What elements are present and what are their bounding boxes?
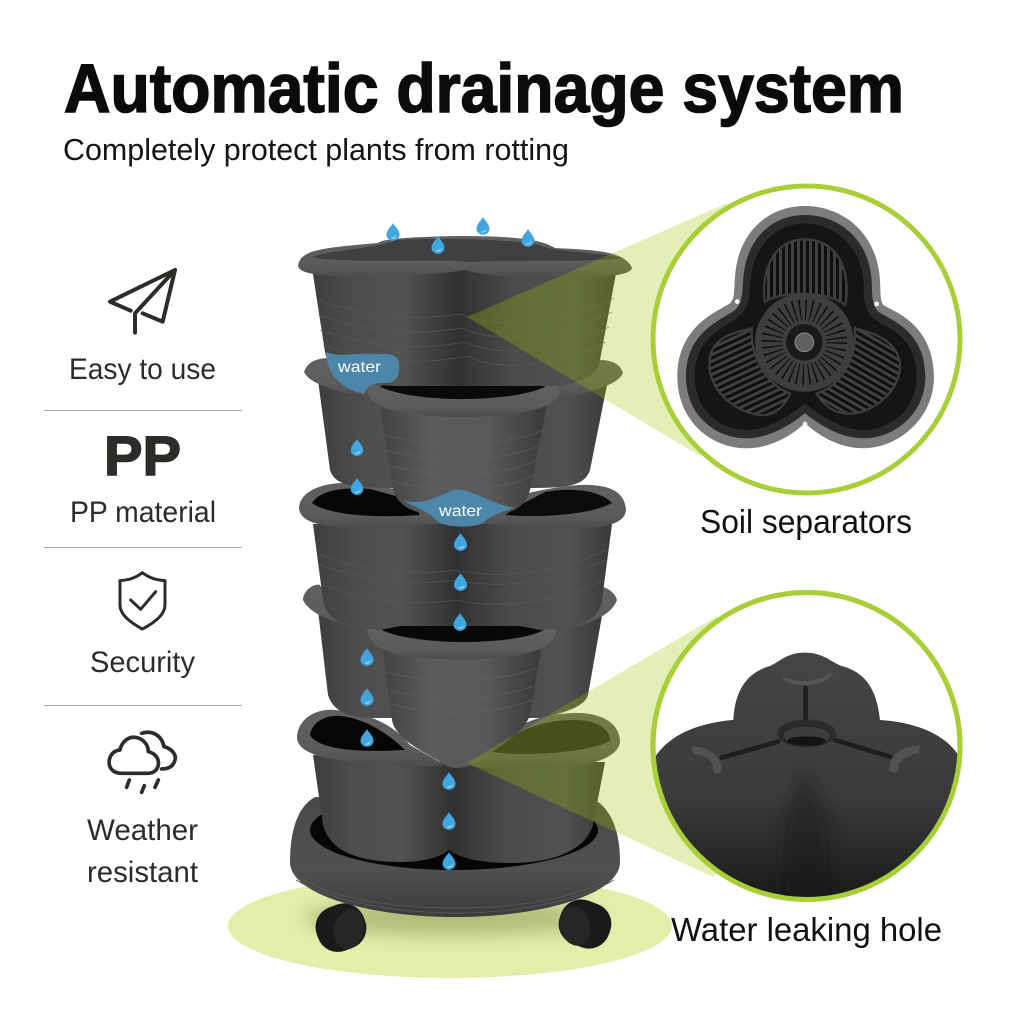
label: security: Security <box>90 646 195 679</box>
title: Automatic drainage system <box>64 50 904 127</box>
green cone: top callout <box>467 203 806 456</box>
tier 5 right rim <box>470 713 620 768</box>
tier 5 left rim <box>297 710 445 767</box>
subtitle: Completely protect plants from rotting <box>63 132 569 167</box>
water label: centre: water <box>438 503 483 520</box>
pot underside view <box>650 653 963 910</box>
label: pp material: PP material <box>70 496 216 529</box>
water label: upper left <box>326 352 399 394</box>
icon: paper plane <box>110 270 175 333</box>
water label: upper left: water <box>337 359 382 376</box>
right wheel <box>553 893 617 955</box>
label: easy to use: Easy to use <box>69 353 216 386</box>
feet <box>782 672 833 685</box>
tier 5 pots <box>297 710 620 863</box>
label: weather resistant line 2: resistant <box>87 856 199 889</box>
water label: centre <box>402 490 515 527</box>
label: weather resistant: Weather <box>87 814 198 847</box>
panel: water leaking hole callout <box>650 592 963 948</box>
water drops <box>351 217 534 870</box>
right grate <box>817 328 900 414</box>
top grate <box>764 239 847 305</box>
panel: feature list <box>44 270 242 889</box>
label: water leaking hole: Water leaking hole <box>671 911 942 948</box>
tier 4 back pots <box>303 585 617 718</box>
green cone: bottom callout <box>467 616 806 877</box>
centre disc with spokes <box>755 293 854 392</box>
left wheel <box>310 897 372 958</box>
tier 3 pots <box>299 483 626 630</box>
tier 4 front pot <box>367 620 556 768</box>
tier 1 top pot <box>298 236 632 386</box>
soil separator top view <box>677 206 934 448</box>
ribs <box>722 688 890 758</box>
panel: soil separators callout <box>653 186 960 540</box>
label: soil separators: Soil separators <box>700 503 912 540</box>
wheeled tray <box>290 790 620 917</box>
tier 2 back pots <box>304 358 623 488</box>
icon: PP: PP <box>104 424 181 487</box>
planter tower <box>290 236 632 958</box>
tier 2 front pot <box>367 378 560 514</box>
icon: rain cloud <box>109 732 175 792</box>
drain hole <box>777 719 836 747</box>
left grate <box>709 328 790 415</box>
icon: shield <box>120 573 165 629</box>
ground ellipse <box>228 874 672 978</box>
